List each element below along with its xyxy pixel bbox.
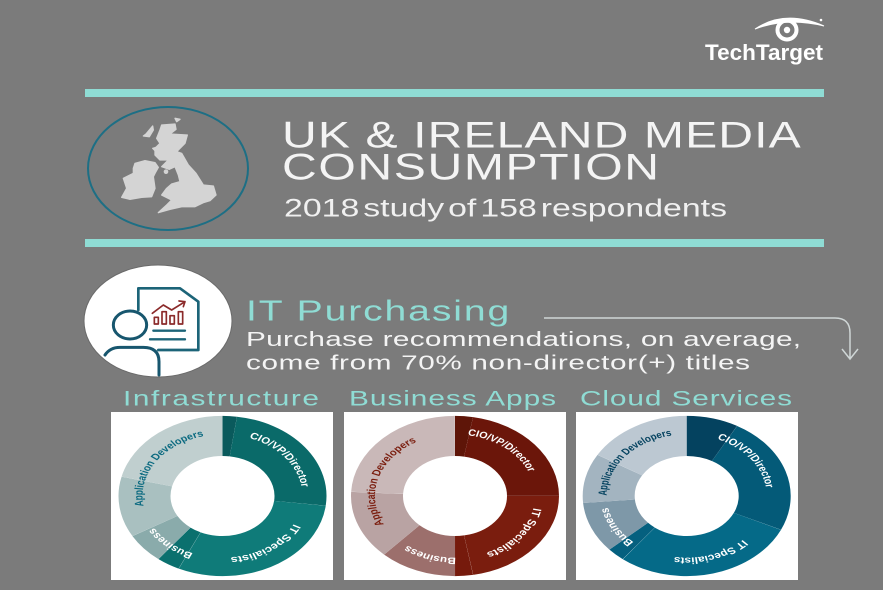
panel: Business Apps donut (344, 412, 566, 580)
icon: UK and Ireland map in circle (88, 107, 248, 230)
panel: Cloud Services donut (576, 412, 798, 580)
label: Application Developers: Application Developers (598, 431, 672, 496)
top rule (85, 89, 824, 97)
label: Application Developers: Application Developers (366, 438, 416, 525)
label: CIO/VP/Director: CIO/VP/Director (468, 429, 534, 471)
logo: TechTarget: TechTarget (705, 40, 824, 65)
label: IT Specialists: IT Specialists (487, 508, 542, 556)
icon: person with report (84, 265, 232, 377)
label: Application Developers: Application Developers (134, 432, 203, 506)
heading: Cloud Services: Cloud Services (580, 388, 792, 410)
label: CIO/VP/Director: CIO/VP/Director (250, 432, 308, 486)
label: CIO/VP/Director: CIO/VP/Director (718, 434, 772, 488)
heading: Infrastructure: Infrastructure (123, 388, 319, 410)
subtitle: 2018 study of 158 respondents (284, 194, 727, 222)
title: CONSUMPTION (282, 147, 659, 188)
text block: purchase recommendations: Purchase recommendations, on average, (246, 328, 801, 351)
label: Business: Business (404, 546, 456, 564)
text block: purchase recommendations: come from 70% non-director(+) titles (246, 352, 750, 374)
label: IT Specialists: IT Specialists (231, 524, 301, 562)
label: Business: Business (150, 528, 192, 559)
title: UK & IRELAND MEDIA (282, 115, 801, 156)
title (282, 115, 801, 188)
text block: purchase recommendations (246, 328, 801, 374)
heading: IT Purchasing: IT Purchasing (246, 295, 509, 327)
label: IT Specialists: IT Specialists (674, 540, 748, 564)
arrow (544, 318, 858, 359)
logo: TechTarget (705, 18, 824, 65)
heading: Business Apps: Business Apps (349, 388, 556, 410)
label: Business: Business (602, 508, 634, 546)
bottom rule (85, 239, 824, 247)
panel: Infrastructure donut (111, 412, 333, 580)
